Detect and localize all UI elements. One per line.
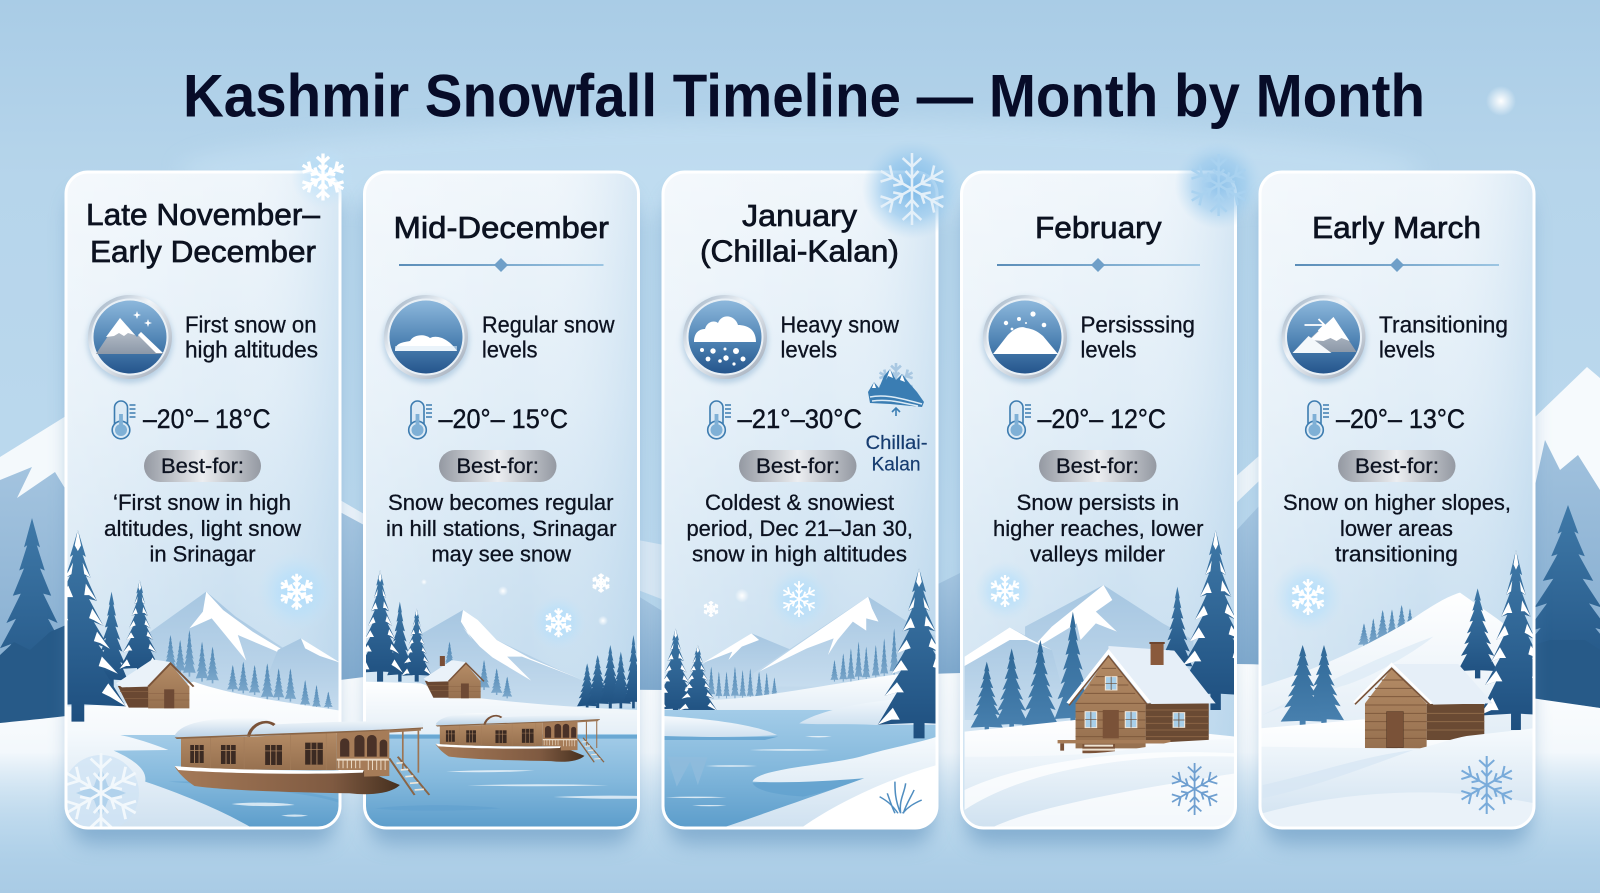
status text: Heavy snow (780, 312, 899, 338)
heading (86, 197, 321, 269)
description: Snow persists in (1016, 490, 1179, 515)
scene: frozen lake (664, 568, 936, 826)
best-for pill: Best-for: (1056, 454, 1139, 478)
heading: Late November– (86, 197, 321, 232)
best-for pill: Best-for: (161, 454, 244, 478)
description: Coldest & snowiest (705, 490, 895, 515)
status text (780, 312, 899, 362)
description: valleys milder (1030, 542, 1165, 566)
icon: thermometer (1306, 401, 1329, 439)
status text (1379, 312, 1508, 362)
panel: mid-december (357, 172, 644, 844)
status text: Transitioning (1379, 312, 1508, 338)
chillai-kalan badge: Chillai- (866, 432, 928, 454)
description: Snow on higher slopes, (1283, 490, 1511, 515)
status text (1080, 312, 1195, 362)
description: may see snow (432, 542, 572, 566)
temperature: –21°–30°C (738, 404, 862, 434)
best-for pill: Best-for: (456, 454, 539, 478)
icon: thermometer (708, 401, 731, 439)
description: altitudes, light snow (104, 516, 302, 541)
panel: january chillai-kalan (655, 139, 962, 844)
status text: levels (1379, 336, 1435, 362)
description: ‘First snow in high (113, 490, 291, 515)
heading: February (1035, 210, 1162, 245)
status text: high altitudes (185, 336, 318, 362)
description: in Srinagar (150, 542, 256, 566)
scene: lake and distant cabin (357, 570, 644, 828)
best-for pill (439, 450, 556, 482)
description (1283, 490, 1511, 566)
icon: snow cloud (682, 295, 768, 383)
houseboat large (175, 718, 429, 795)
icon: snowy peaks (87, 295, 173, 383)
icon: thermometer (1008, 401, 1031, 439)
heading (700, 198, 899, 268)
divider (997, 258, 1200, 272)
description: period, Dec 21–Jan 30, (686, 516, 913, 541)
status text: Persisssing (1080, 312, 1195, 338)
divider (399, 258, 604, 272)
corner snowflake (1175, 141, 1263, 229)
description: lower areas (1340, 516, 1453, 541)
status text: levels (1080, 336, 1136, 362)
status text: Regular snow (482, 312, 615, 338)
description (993, 490, 1204, 566)
heading: Early December (90, 234, 316, 269)
chillai-kalan badge: Kalan (872, 454, 920, 476)
best-for pill: Best-for: (756, 454, 840, 478)
temperature: –20°– 18°C (143, 404, 270, 434)
description: transitioning (1335, 542, 1458, 566)
heading: January (742, 198, 858, 233)
panel: late november to early december (58, 154, 348, 854)
best-for pill (1338, 450, 1456, 482)
temperature: –20°– 12°C (1038, 404, 1166, 434)
best-for pill: Best-for: (1355, 454, 1439, 478)
best-for pill (144, 450, 261, 482)
icon: thermometer (409, 401, 432, 439)
status text: First snow on (185, 312, 316, 338)
panel: early march (1260, 172, 1553, 844)
heading: (Chillai-Kalan) (700, 234, 899, 268)
icon: thermometer (112, 401, 136, 439)
decorative sparkle (1486, 86, 1516, 116)
status text (185, 312, 318, 362)
temperature: –20°– 15°C (438, 404, 568, 434)
divider (1295, 258, 1499, 272)
houseboat small (436, 713, 604, 762)
description: in hill stations, Srinagar (386, 516, 617, 541)
description: higher reaches, lower (993, 516, 1204, 541)
description (386, 490, 617, 566)
title: Kashmir Snowfall Timeline — Month by Month (183, 62, 1425, 130)
chillai-kalan badge (866, 363, 928, 476)
scene: mountains, cabin and lake (30, 530, 340, 833)
icon: mountains with arrow (1280, 295, 1366, 383)
description: Snow becomes regular (388, 490, 614, 515)
corner snowflake (862, 139, 962, 239)
description (104, 490, 302, 566)
status text: levels (780, 336, 837, 362)
description: snow in high altitudes (692, 542, 907, 566)
icon: snow mound (383, 295, 469, 383)
best-for pill (739, 450, 856, 482)
temperature: –20°– 13°C (1336, 404, 1465, 434)
heading: Early March (1312, 210, 1481, 245)
scene: hillside cabin (1260, 550, 1553, 828)
panel: february (962, 141, 1263, 844)
heading: Mid-December (394, 210, 609, 245)
corner snowflake (291, 145, 355, 209)
scene: large cabin (965, 530, 1255, 828)
status text (482, 312, 615, 362)
icon: snowy mountain badge (868, 363, 924, 416)
icon: snow peak with flakes (982, 295, 1068, 383)
description (686, 490, 913, 566)
best-for pill (1039, 450, 1156, 482)
status text: levels (482, 336, 538, 362)
